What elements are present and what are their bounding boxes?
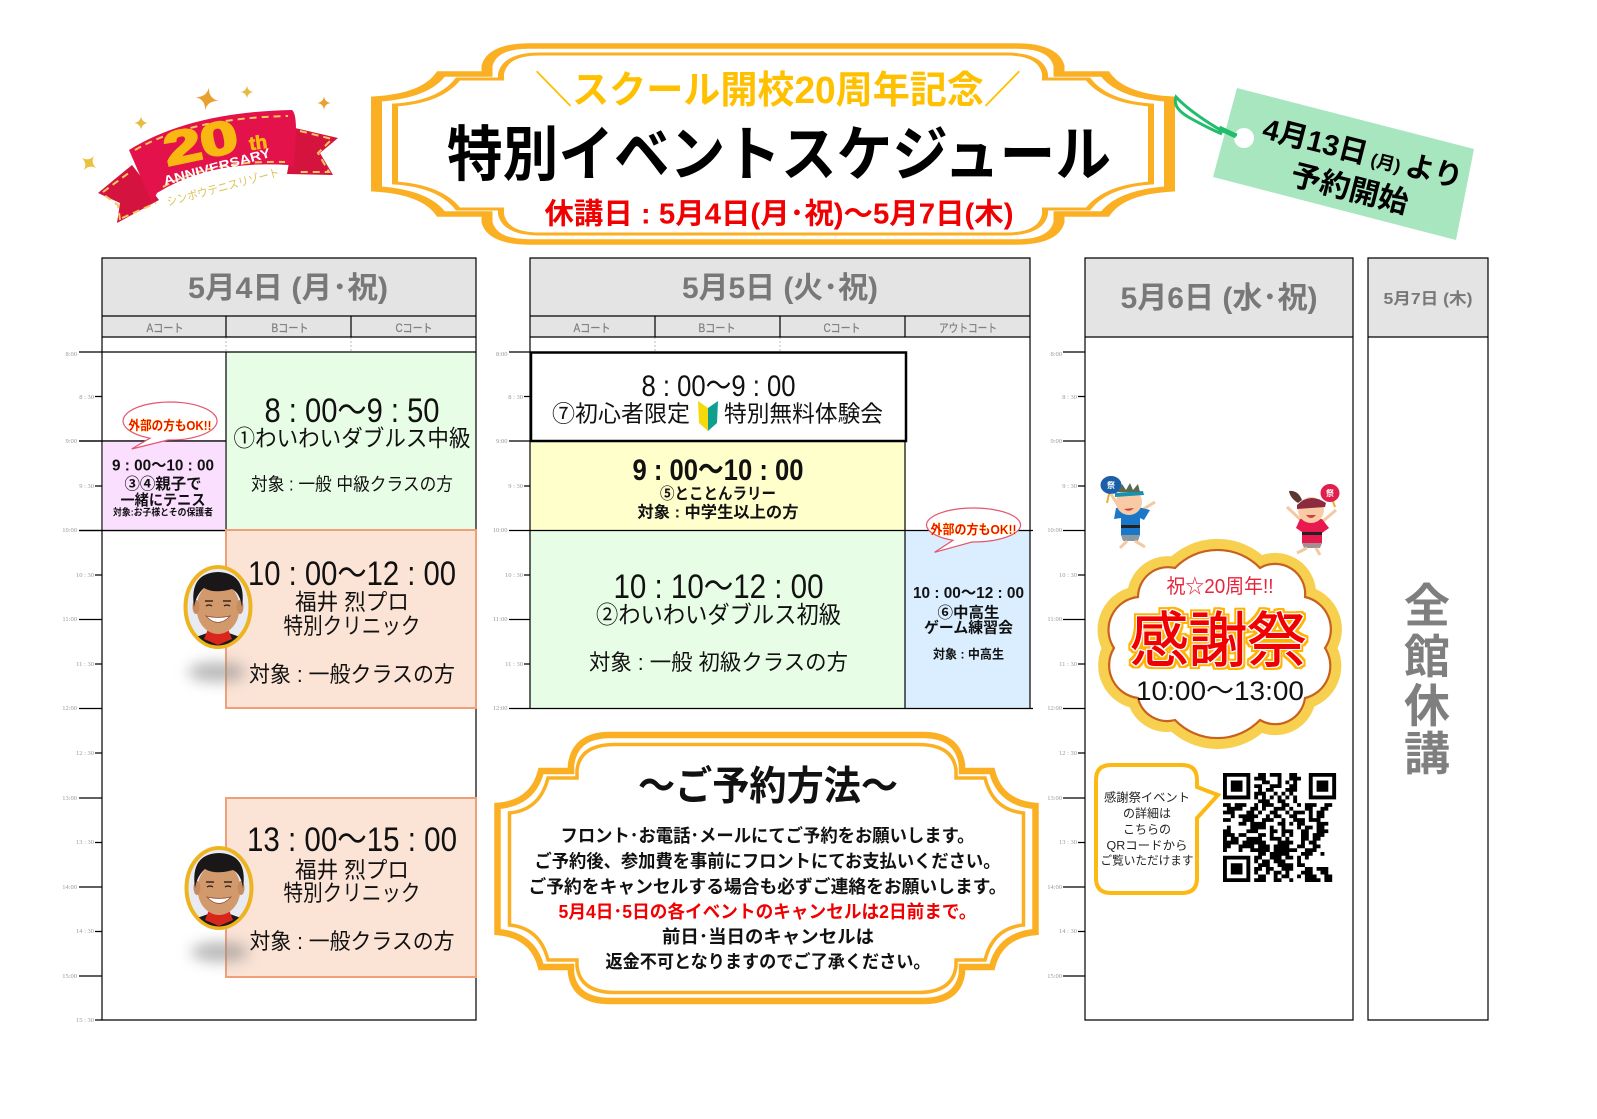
time axis: 12 : 30 bbox=[1059, 750, 1077, 757]
event: junior game practice: ⑥中高生 bbox=[938, 604, 1000, 622]
panel: how to reserve bbox=[498, 735, 1036, 1001]
event: beginner free trial: ⑦初心者限定 bbox=[552, 400, 690, 426]
event: beginner free trial bbox=[531, 352, 906, 441]
time axis: 11:00 bbox=[1047, 616, 1062, 623]
event: waiwai doubles beginner: ②わいわいダブルス初級 bbox=[596, 602, 841, 629]
anniversary logo: 20 bbox=[159, 109, 242, 175]
callout: outside guests ok bbox=[123, 402, 217, 449]
event: Fukui pro clinic afternoon bbox=[226, 798, 476, 977]
event: Fukui pro clinic morning: 10 : 00〜12 : 00 bbox=[248, 555, 456, 593]
callout: QR guide: こちらの bbox=[1123, 822, 1171, 836]
event: Fukui pro clinic afternoon: 福井 烈プロ bbox=[295, 858, 409, 883]
event: Fukui pro clinic afternoon: 13 : 00〜15 : 00 bbox=[247, 821, 457, 859]
badge: thanksgiving festival: 祝☆20周年!! bbox=[1166, 575, 1274, 598]
portrait afternoon bbox=[186, 848, 252, 962]
date heading: 5月4日 (月･祝) bbox=[188, 272, 388, 305]
event: parent and child tennis: 9 : 00〜10 : 00 bbox=[112, 458, 214, 474]
tag text bbox=[1250, 114, 1466, 232]
reservation instructions: ご予約をキャンセルする場合も必ずご連絡をお願いします。 bbox=[528, 876, 1006, 897]
time axis: 12 : 30 bbox=[76, 750, 94, 757]
date heading: 5月6日 (水･祝) bbox=[1120, 282, 1318, 315]
court labels: アウトコート bbox=[939, 322, 997, 335]
event: junior game practice bbox=[905, 530, 1030, 708]
closed notice: 全 bbox=[1404, 580, 1450, 632]
time axis: 14 : 30 bbox=[1059, 928, 1077, 935]
event: waiwai doubles beginner: 対象 : 一般 初級クラスの方 bbox=[589, 650, 848, 675]
time axis bbox=[1047, 351, 1085, 980]
time axis: 14:00 bbox=[62, 884, 77, 891]
time axis: 10:00 bbox=[62, 527, 77, 534]
time axis: 10 : 30 bbox=[505, 572, 523, 579]
time axis: 9 : 30 bbox=[79, 483, 94, 490]
closed notice bbox=[1404, 580, 1450, 780]
event: junior game practice: ゲーム練習会 bbox=[924, 618, 1013, 636]
time axis: 11 : 30 bbox=[1059, 661, 1077, 668]
callout: QR guide: の詳細は bbox=[1123, 806, 1171, 820]
callout: QR guide: QRコードから bbox=[1106, 838, 1188, 852]
callout: outside guests ok bbox=[927, 508, 1021, 552]
time axis bbox=[62, 351, 476, 1024]
time axis: 9 : 30 bbox=[1062, 483, 1077, 490]
time axis: 15:00 bbox=[62, 973, 77, 980]
tag text: 予約開始 bbox=[1287, 159, 1412, 220]
time axis: 13 : 30 bbox=[76, 839, 94, 846]
date heading: 5月5日 (火･祝) bbox=[682, 272, 878, 305]
time axis: 8:00 bbox=[65, 351, 77, 358]
time axis: 14:00 bbox=[1047, 884, 1062, 891]
event: Fukui pro clinic afternoon: 特別クリニック bbox=[284, 881, 420, 906]
badge: thanksgiving festival bbox=[1109, 550, 1331, 738]
court labels: Cコート bbox=[824, 323, 860, 335]
callout: QR guide: ご覧いただけます bbox=[1100, 852, 1194, 868]
time axis: 9:00 bbox=[1050, 438, 1062, 445]
time axis: 11:00 bbox=[493, 616, 508, 623]
time axis: 11 : 30 bbox=[505, 661, 523, 668]
anniversary logo: ANNIVERSARY bbox=[162, 145, 272, 188]
court labels: Bコート bbox=[698, 323, 736, 335]
time axis: 8 : 30 bbox=[508, 394, 523, 401]
time axis: 10 : 30 bbox=[76, 572, 94, 579]
callout: QR guide bbox=[1096, 765, 1218, 893]
reservation instructions: ご予約後、参加費を事前にフロントにてお支払いください。 bbox=[534, 850, 1000, 872]
reservation instructions: 前日･当日のキャンセルは bbox=[662, 927, 874, 947]
event: parent and child tennis: ③④親子で bbox=[124, 475, 202, 493]
time axis: 8:00 bbox=[496, 351, 508, 358]
court labels bbox=[146, 323, 432, 335]
tag text: 4月13日 (月) より bbox=[1259, 114, 1466, 195]
reservation instructions: 返金不可となりますのでご了承ください。 bbox=[606, 951, 930, 972]
time axis: 9:00 bbox=[65, 438, 77, 445]
event: parent and child tennis bbox=[79, 441, 226, 530]
time axis: 12:00 bbox=[493, 705, 508, 712]
heading: 〜ご予約方法〜 bbox=[638, 764, 898, 808]
panel: May 5 bbox=[493, 258, 1033, 712]
time axis: 11:00 bbox=[62, 616, 77, 623]
icon: beginner mark bbox=[698, 401, 718, 431]
badge: thanksgiving festival: 感謝祭 bbox=[1130, 608, 1306, 674]
closed notice: 休 bbox=[1404, 680, 1450, 732]
time axis: 12:00 bbox=[62, 705, 77, 712]
callout: outside guests ok: 外部の方もOK!! bbox=[128, 418, 212, 433]
illustration: festival girl bbox=[1287, 484, 1340, 555]
court labels: Aコート bbox=[574, 323, 610, 335]
time axis: 12:00 bbox=[1047, 705, 1062, 712]
event: rally: 9 : 00〜10 : 00 bbox=[632, 454, 804, 487]
panel: May 6 bbox=[1047, 258, 1353, 1020]
time axis: 10 : 30 bbox=[1059, 572, 1077, 579]
court labels: Aコート bbox=[146, 323, 184, 335]
QR code bbox=[1223, 775, 1334, 880]
closed days note: 休講日 : 5月4日(月･祝)〜5月7日(木) bbox=[544, 198, 1014, 230]
panel: May 7 bbox=[1368, 258, 1488, 1020]
event: rally bbox=[530, 441, 905, 530]
court labels: Bコート bbox=[272, 323, 308, 335]
court labels bbox=[574, 322, 997, 335]
event: Fukui pro clinic morning: 対象 : 一般クラスの方 bbox=[249, 662, 455, 687]
badge: thanksgiving festival: 10:00〜13:00 bbox=[1136, 676, 1304, 706]
event: Fukui pro clinic morning: 特別クリニック bbox=[284, 614, 420, 639]
event: parent and child tennis: 一緒にテニス bbox=[120, 491, 206, 509]
time axis: 8 : 30 bbox=[1062, 394, 1077, 401]
reservation instructions bbox=[528, 825, 1006, 972]
event: parent and child tennis: 対象:お子様とその保護者 bbox=[113, 506, 213, 518]
date heading: 5月7日 (木) bbox=[1384, 290, 1472, 308]
event: Fukui pro clinic afternoon: 対象 : 一般クラスの方 bbox=[250, 929, 454, 954]
main title: 特別イベントスケジュール bbox=[447, 122, 1111, 188]
time axis: 10:00 bbox=[1047, 527, 1062, 534]
closed notice: 館 bbox=[1404, 631, 1450, 683]
event: waiwai doubles intermediate bbox=[234, 392, 470, 494]
time axis: 13:00 bbox=[1047, 795, 1062, 802]
reservation instructions: 5月4日･5日の各イベントのキャンセルは2日前まで。 bbox=[558, 901, 976, 922]
callout: QR guide: 感謝祭イベント bbox=[1104, 790, 1190, 804]
event: beginner free trial: 特別無料体験会 bbox=[724, 400, 883, 426]
anniversary logo bbox=[76, 86, 338, 223]
title frame bbox=[376, 46, 1170, 242]
panel: May 4 bbox=[62, 258, 476, 1024]
event: Fukui pro clinic morning: 福井 烈プロ bbox=[295, 590, 409, 615]
time axis: 15:00 bbox=[1047, 973, 1062, 980]
time axis: 10:00 bbox=[493, 527, 508, 534]
event: junior game practice: 対象 : 中高生 bbox=[933, 646, 1004, 662]
event: waiwai doubles intermediate: 対象 : 一般 中級クラスの方 bbox=[251, 474, 453, 494]
subtitle: ＼スクール開校20周年記念／ bbox=[535, 70, 1021, 112]
event: beginner free trial: 8 : 00〜9 : 00 bbox=[642, 370, 796, 403]
time axis: 11 : 30 bbox=[76, 661, 94, 668]
callout: outside guests ok: 外部の方もOK!! bbox=[930, 522, 1016, 537]
illustration: festival boy: 祭 bbox=[1107, 480, 1115, 490]
event: waiwai doubles beginner: 10 : 10〜12 : 00 bbox=[614, 568, 824, 606]
reservation tag bbox=[1175, 88, 1474, 240]
anniversary logo: シンボウテニスリゾート bbox=[165, 166, 281, 209]
time axis: 13:00 bbox=[62, 795, 77, 802]
event: junior game practice: 10 : 00〜12 : 00 bbox=[913, 585, 1024, 602]
event: rally: ⑤とことんラリー bbox=[660, 485, 776, 503]
schedule infographic bbox=[62, 43, 1489, 1022]
closed notice: 講 bbox=[1404, 728, 1450, 780]
time axis: 9 : 30 bbox=[508, 483, 523, 490]
portrait morning bbox=[186, 567, 250, 682]
time axis: 14 : 30 bbox=[76, 928, 94, 935]
court labels: Cコート bbox=[396, 323, 432, 335]
time axis: 9:00 bbox=[496, 438, 508, 445]
time axis bbox=[493, 351, 1033, 712]
event: rally: 対象 : 中学生以上の方 bbox=[638, 502, 798, 522]
illustration: festival boy bbox=[1100, 476, 1155, 548]
event: Fukui pro clinic morning bbox=[226, 530, 476, 708]
anniversary logo: th bbox=[248, 132, 269, 155]
time axis: 15 : 30 bbox=[76, 1017, 94, 1024]
reservation instructions: フロント･お電話･メールにてご予約をお願いします。 bbox=[560, 825, 974, 846]
time axis: 13 : 30 bbox=[1059, 839, 1077, 846]
event: waiwai doubles intermediate: ①わいわいダブルス中級 bbox=[234, 425, 470, 451]
time axis: 8:00 bbox=[1050, 351, 1062, 358]
time axis: 8 : 30 bbox=[79, 394, 94, 401]
illustration: festival girl: 祭 bbox=[1326, 488, 1334, 498]
event: waiwai doubles beginner bbox=[530, 530, 905, 708]
event: waiwai doubles intermediate: 8 : 00〜9 : 50 bbox=[264, 392, 440, 430]
